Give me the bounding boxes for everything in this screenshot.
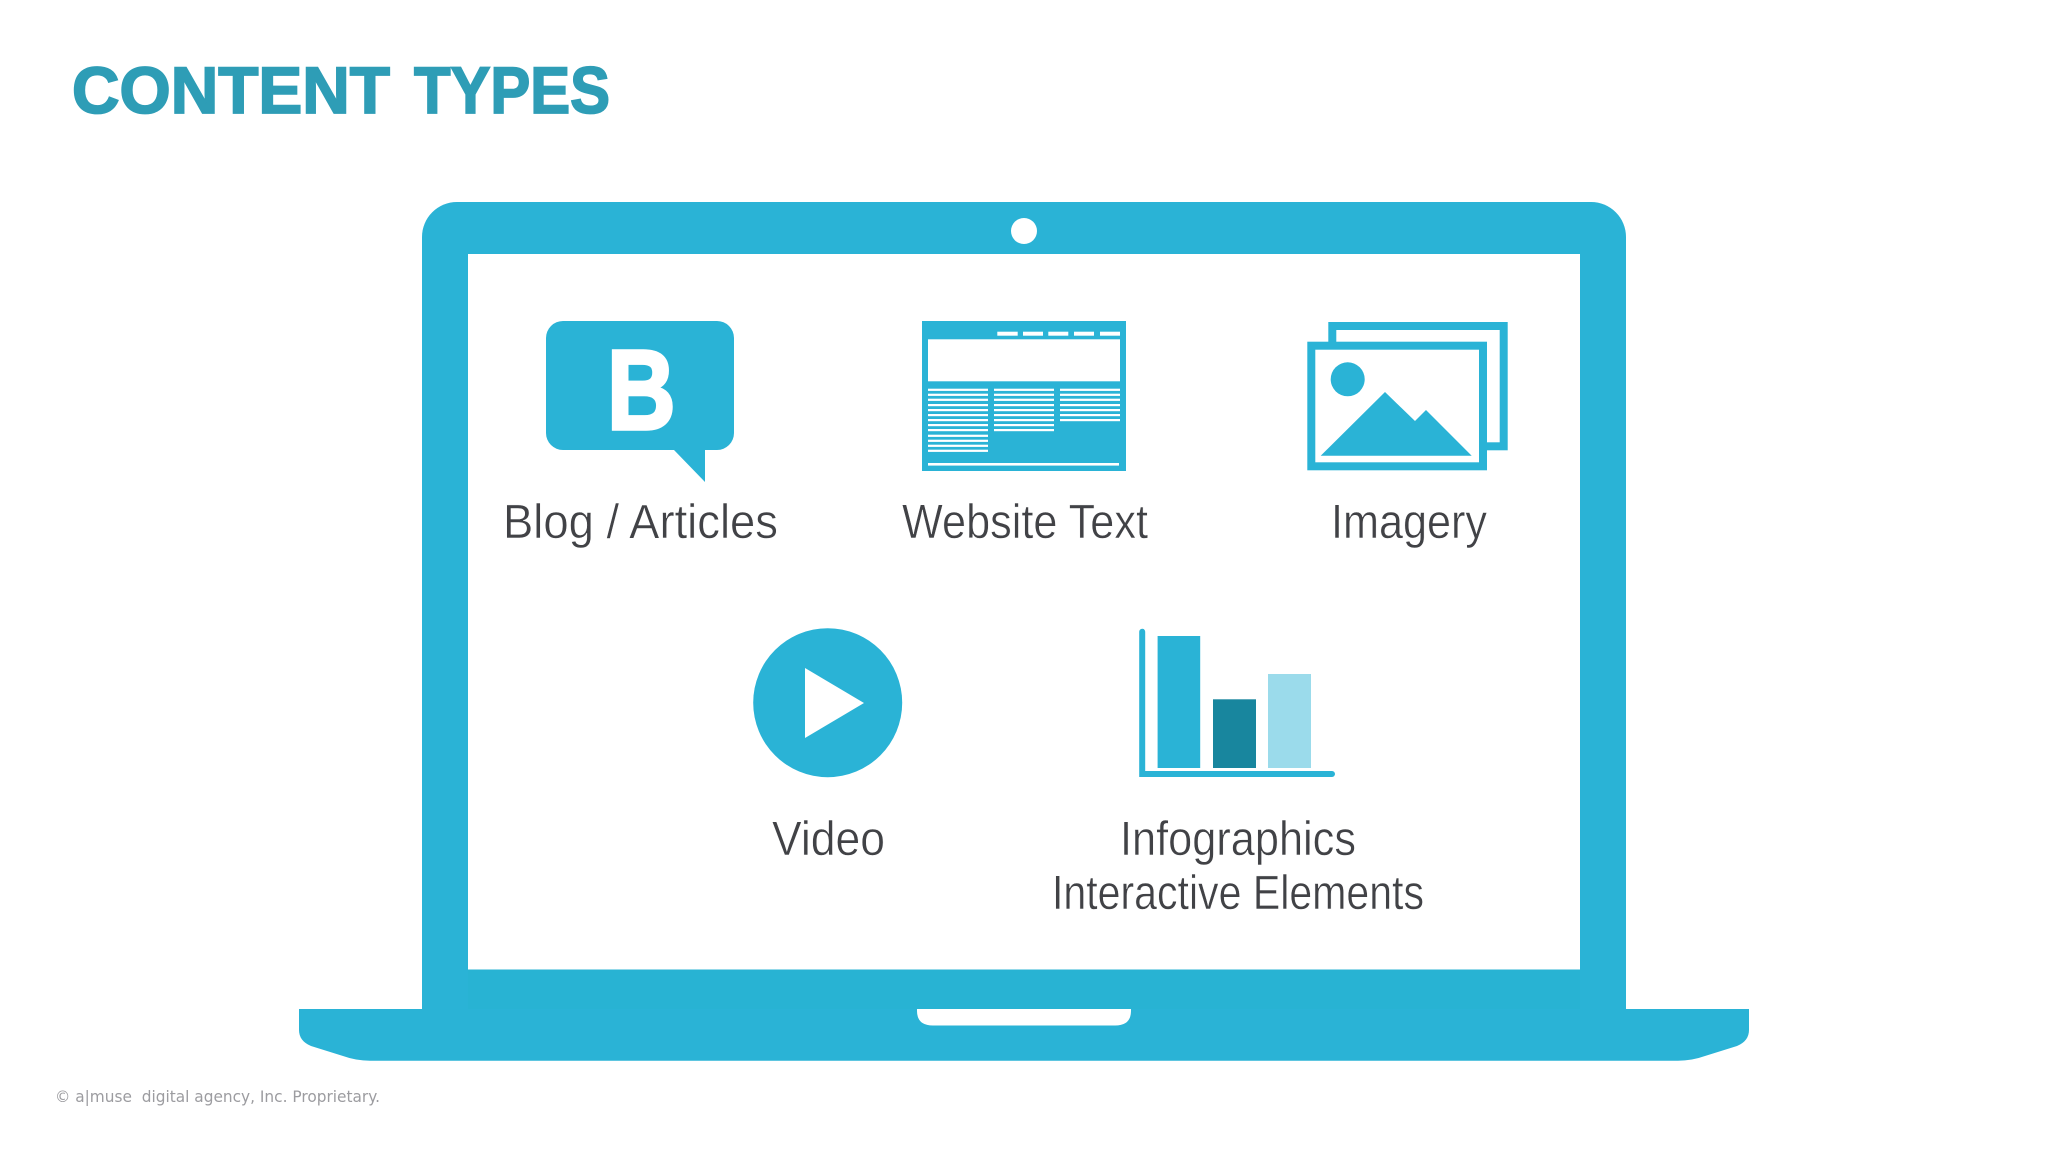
chart axes (1142, 632, 1332, 774)
laptop (299, 202, 1749, 1061)
webcam (1011, 218, 1037, 244)
icon: video play button (753, 628, 902, 777)
trackpad notch (917, 1009, 1131, 1026)
label: video: Video (772, 813, 885, 866)
icon: website layout (922, 321, 1126, 471)
laptop base (299, 1009, 1749, 1061)
laptop screen (468, 254, 1580, 970)
icon: blog speech bubble (546, 321, 734, 482)
icon: image frames (1311, 326, 1504, 466)
icon: blog speech bubble: B (607, 328, 676, 454)
icon: bar chart (1142, 632, 1332, 774)
footer copyright: © a|muse digital agency, Inc. Proprietary. (55, 1087, 380, 1106)
laptop lid (422, 202, 1626, 1010)
lower bezel (468, 970, 1580, 1009)
label: website text: Website Text (902, 496, 1148, 549)
label: blog articles: Blog / Articles (503, 496, 778, 549)
bar 3 (1268, 674, 1311, 768)
title: CONTENT (72, 53, 390, 127)
bar 2 (1213, 699, 1256, 768)
title (72, 53, 610, 127)
label: interactive elements: Interactive Elements (1052, 867, 1424, 920)
bar 1 (1158, 636, 1200, 768)
label: infographics: Infographics (1120, 813, 1356, 866)
title: TYPES (414, 53, 610, 127)
label: imagery: Imagery (1331, 496, 1487, 549)
